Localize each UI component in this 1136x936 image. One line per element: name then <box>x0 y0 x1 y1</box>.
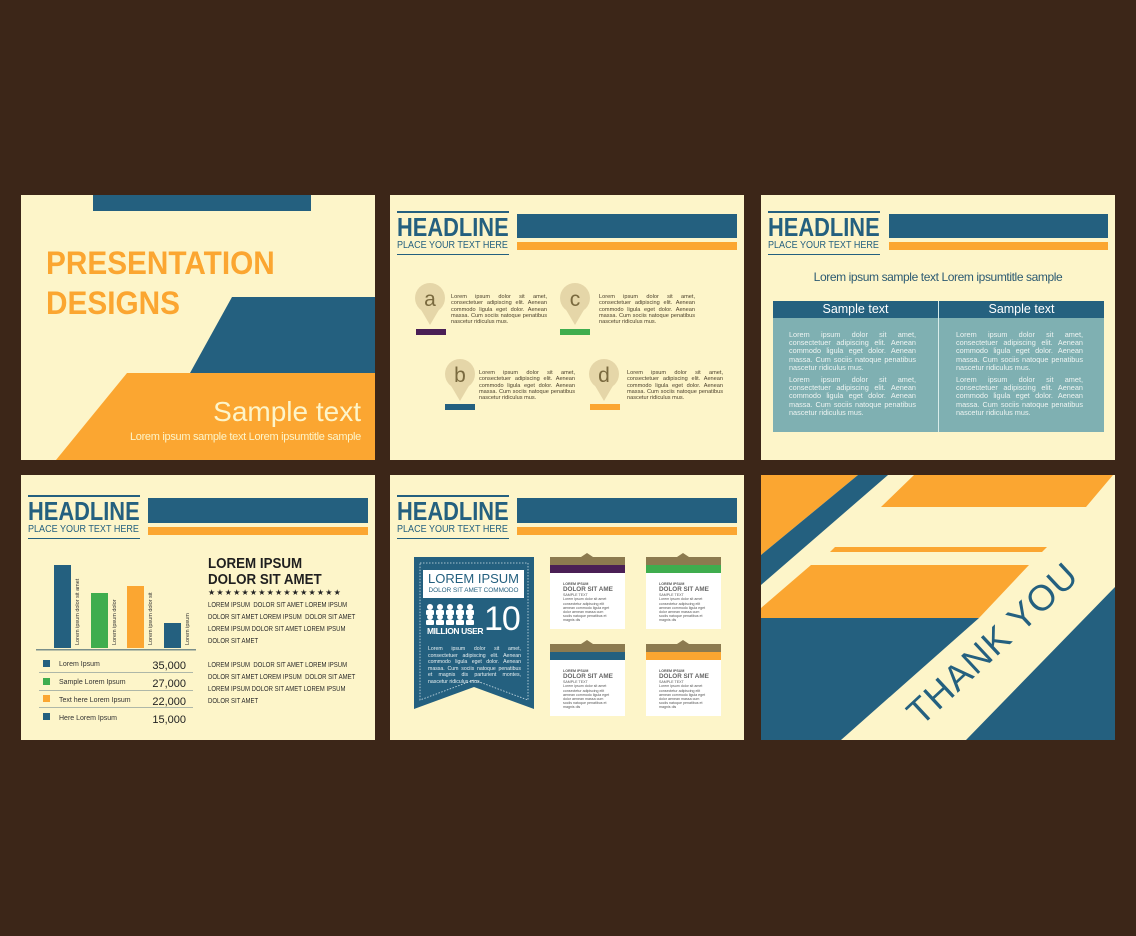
right heading: DOLOR SIT AMET <box>208 572 322 588</box>
slide 5: banner and cards: LOREM IPSUM SAMPLE TEXT <box>659 582 684 597</box>
title text: PRESENTATION <box>46 245 275 281</box>
bar chart: Here Lorem Ipsum <box>59 715 117 722</box>
bar chart: Lorem ipsum dolor <box>112 599 118 645</box>
slide 4: chart <box>21 475 375 740</box>
subtitle: Lorem ipsum sample text Lorem ipsumtitle sample <box>814 270 1062 284</box>
slide 4: chart: DOLOR SIT AMET LOREM IPSUM DOLOR SIT AMET <box>208 672 355 681</box>
slide 5: banner and cards <box>390 475 744 740</box>
slide 5: banner and cards: LOREM IPSUM SAMPLE TEXT <box>563 669 588 684</box>
right text: LOREM IPSUM DOLOR SIT AMET LOREM IPSUM <box>208 600 347 609</box>
pin texts: Lorem ipsum dolor sit amet, consectetuer adipiscing elit. Aenean commodo ligula eget dolor. Aenean massa. Cum sociis natoque penatibus nascetur ridiculus mus. <box>451 294 547 325</box>
right text: DOLOR SIT AMET <box>208 636 258 645</box>
headline: PLACE YOUR TEXT HERE <box>397 238 508 250</box>
slide 2: pins: Lorem ipsum dolor sit amet, consectetuer adipiscing elit. Aenean commodo ligula eget dolor. Aenean massa. Cum sociis natoque penatibus nascetur ridiculus mus. <box>627 370 723 401</box>
slide 4: chart: LOREM IPSUM DOLOR SIT AMET LOREM IPSUM <box>208 684 345 693</box>
right text: DOLOR SIT AMET LOREM IPSUM DOLOR SIT AMET <box>208 612 355 621</box>
bar chart: 27,000 <box>152 678 186 690</box>
bar chart: Lorem ipsum dolor sit <box>148 592 154 645</box>
title text <box>46 245 275 321</box>
headline <box>397 495 509 539</box>
bar chart: Lorem ipsum <box>185 613 191 645</box>
header bars <box>889 214 1108 238</box>
headline <box>28 495 140 539</box>
pins <box>415 283 620 410</box>
headline <box>768 211 880 255</box>
thank you text: THANK YOU <box>898 554 1086 733</box>
stars: ★★★★★★★★★★★★★★★★ <box>208 588 342 597</box>
slide 1: title <box>21 195 375 460</box>
right text: LOREM IPSUM DOLOR SIT AMET LOREM IPSUM <box>208 624 345 633</box>
banner <box>414 557 534 709</box>
headline: HEADLINE <box>397 212 509 242</box>
text left: Lorem ipsum dolor sit amet, consectetuer adipiscing elit. Aenean commodo ligula eget dolor. Aenean massa. Cum sociis natoque penatibus nascetur ridiculus mus. Lorem ipsum dolor sit amet, consectetuer adipiscing elit. Aenean commodo ligula eget dolor. Aenean massa. Cum sociis natoque penatibus nascetur ridiculus mus. <box>789 330 916 417</box>
table <box>773 301 1104 432</box>
slide 5: banner and cards: Lorem ipsum dolor sit amet consectetur adipiscing elit aenean commodo ligula eget dolor aenean massa cum sociis natoque penatibus et magnis dis <box>659 597 705 622</box>
headline: PLACE YOUR TEXT HERE <box>397 522 508 534</box>
slide 3: table <box>761 195 1115 460</box>
right heading: LOREM IPSUM <box>208 556 302 572</box>
top blue bar <box>93 195 311 211</box>
bar chart: 35,000 <box>152 660 186 672</box>
pins: d <box>598 364 610 387</box>
banner title box: DOLOR SIT AMET COMMODO <box>429 587 518 594</box>
banner text: Lorem ipsum dolor sit amet, consectetuer adipiscing elit. Aenean commodo ligula eget dolor. Aenean massa. Cum sociis natoque penatibus et magnis dis parturient montes, nascetur ridiculus mus. <box>428 646 521 684</box>
header right <box>939 301 1104 318</box>
header bars <box>517 214 737 238</box>
slide 4: chart: DOLOR SIT AMET <box>208 696 258 705</box>
text right: Lorem ipsum dolor sit amet, consectetuer adipiscing elit. Aenean commodo ligula eget dolor. Aenean massa. Cum sociis natoque penatibus nascetur ridiculus mus. Lorem ipsum dolor sit amet, consectetuer adipiscing elit. Aenean commodo ligula eget dolor. Aenean massa. Cum sociis natoque penatibus nascetur ridiculus mus. <box>956 330 1083 417</box>
cards <box>550 553 625 629</box>
headline: HEADLINE <box>397 496 509 526</box>
header left: Sample text <box>822 302 888 316</box>
slide 5: banner and cards: Lorem ipsum dolor sit amet consectetur adipiscing elit aenean commodo ligula eget dolor aenean massa cum sociis natoque penatibus et magnis dis <box>563 684 609 709</box>
bar chart: Lorem ipsum dolor sit amet <box>75 578 81 645</box>
headline: PLACE YOUR TEXT HERE <box>768 238 879 250</box>
pins: c <box>570 288 580 311</box>
bar chart: 22,000 <box>152 696 186 708</box>
shapes <box>56 297 375 460</box>
banner title box: LOREM IPSUM <box>428 571 519 586</box>
number 10: 10 <box>484 600 520 638</box>
slide 2: pins: Lorem ipsum dolor sit amet, consectetuer adipiscing elit. Aenean commodo ligula eget dolor. Aenean massa. Cum sociis natoque penatibus nascetur ridiculus mus. <box>479 370 575 401</box>
pins: b <box>454 364 466 387</box>
headline: HEADLINE <box>768 212 880 242</box>
bar chart: 15,000 <box>152 714 186 726</box>
million user: MILLION USER <box>427 626 483 636</box>
header left <box>773 301 938 318</box>
right text <box>208 600 356 645</box>
header right: Sample text <box>988 302 1054 316</box>
bar chart: Text here Lorem Ipsum <box>59 697 131 704</box>
bar chart <box>36 565 196 726</box>
sample text: Sample text <box>213 396 361 427</box>
headline <box>397 211 509 255</box>
headline: PLACE YOUR TEXT HERE <box>28 522 139 534</box>
slide 6: thank you <box>761 475 1115 740</box>
title text: DESIGNS <box>46 285 180 321</box>
header bars <box>517 498 737 523</box>
slide 5: banner and cards: Lorem ipsum dolor sit amet consectetur adipiscing elit aenean commodo ligula eget dolor aenean massa cum sociis natoque penatibus et magnis dis <box>659 684 705 709</box>
banner title box <box>423 570 524 598</box>
slide 5: banner and cards: LOREM IPSUM SAMPLE TEXT <box>659 669 684 684</box>
cards: LOREM IPSUM SAMPLE TEXT <box>563 582 588 597</box>
slide 2: pins: Lorem ipsum dolor sit amet, consectetuer adipiscing elit. Aenean commodo ligula eget dolor. Aenean massa. Cum sociis natoque penatibus nascetur ridiculus mus. <box>599 294 695 325</box>
bar chart: Sample Lorem Ipsum <box>59 679 126 686</box>
bar chart: Lorem Ipsum <box>59 661 100 668</box>
slide 2: pins <box>390 195 744 460</box>
header bars <box>148 498 368 523</box>
slide 4: chart: LOREM IPSUM DOLOR SIT AMET LOREM IPSUM <box>208 660 347 669</box>
headline: HEADLINE <box>28 496 140 526</box>
pins: a <box>424 288 436 311</box>
right heading <box>208 556 322 588</box>
cards: Lorem ipsum dolor sit amet consectetur adipiscing elit aenean commodo ligula eget dolor aenean massa cum sociis natoque penatibus et magnis dis <box>563 597 609 622</box>
subtitle: Lorem ipsum sample text Lorem ipsumtitle sample <box>130 431 361 443</box>
